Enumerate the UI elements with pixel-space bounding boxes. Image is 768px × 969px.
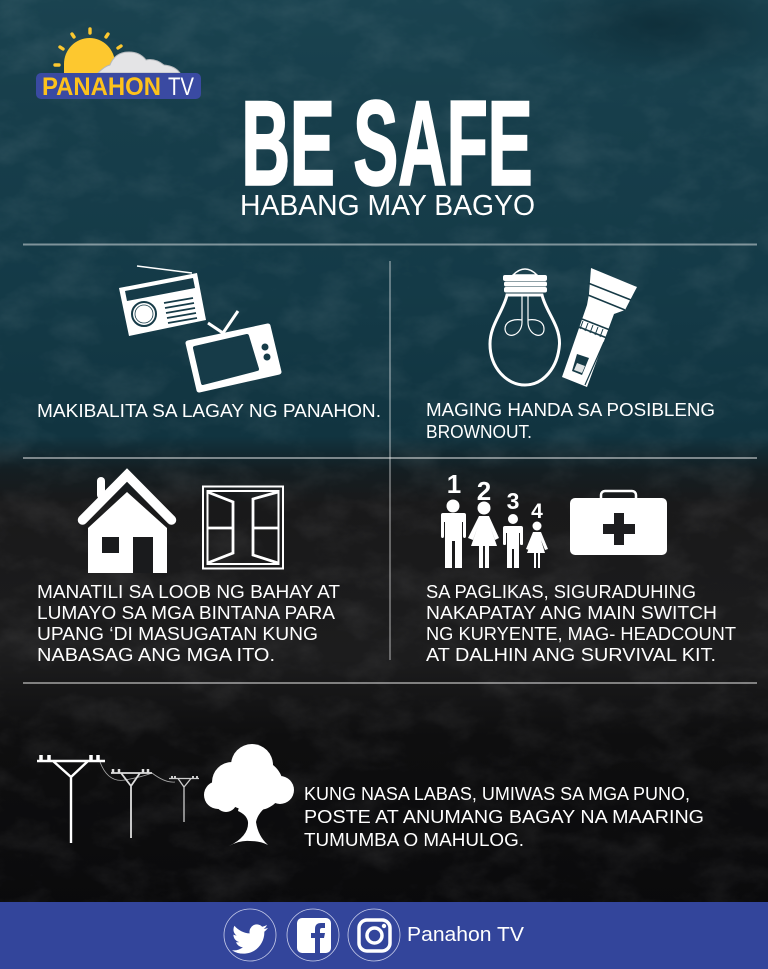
text: stay indoors: LUMAYO SA MGA BINTANA PARA [37, 603, 335, 623]
text: Panahon TV handle: Panahon TV [407, 924, 525, 946]
title: BE SAFE [242, 76, 532, 210]
panel: stay indoors [37, 475, 340, 665]
icon: twitter [224, 909, 276, 961]
text: evacuation: SA PAGLIKAS, SIGURADUHING [426, 582, 696, 602]
panel: stay informed [37, 266, 381, 421]
icon: family headcount: 4 [531, 500, 543, 523]
icon: instagram [348, 909, 400, 961]
text: outdoors: KUNG NASA LABAS, UMIWAS SA MGA PUNO, [304, 784, 690, 804]
panel: outdoors [37, 744, 704, 850]
text: evacuation: NAKAPATAY ANG MAIN SWITCH [426, 603, 717, 623]
text: stay indoors: NABASAG ANG MGA ITO. [37, 645, 275, 665]
logo: Panahon TV [36, 29, 201, 101]
icon: family headcount: 2 [477, 476, 491, 506]
panel: evacuation [426, 469, 736, 665]
title: HABANG MAY BAGYO [240, 190, 535, 222]
icon: tree [204, 744, 294, 846]
logo: Panahon TV: PANAHON [42, 73, 161, 101]
icon: family headcount: 3 [507, 488, 519, 514]
text: outdoors: POSTE AT ANUMANG BAGAY NA MAARING [304, 807, 704, 827]
text: evacuation: AT DALHIN ANG SURVIVAL KIT. [426, 645, 716, 665]
icon: television [188, 311, 279, 390]
text: stay indoors: MANATILI SA LOOB NG BAHAY AT [37, 582, 340, 602]
icon: facebook [287, 909, 339, 961]
text: evacuation [426, 582, 736, 665]
icon: house [82, 475, 172, 573]
text: stay informed: MAKIBALITA SA LAGAY NG PANAHON. [37, 401, 381, 421]
icon: survival kit [570, 491, 667, 555]
icon: family headcount: 1 [447, 469, 461, 499]
text: stay indoors: UPANG ‘DI MASUGATAN KUNG [37, 624, 318, 644]
icon: power poles [37, 755, 199, 843]
icon: radio [119, 266, 206, 336]
text: brownout: BROWNOUT. [426, 422, 532, 442]
panel: brownout [426, 268, 715, 442]
text: outdoors: TUMUMBA O MAHULOG. [304, 830, 524, 850]
footer bar [0, 902, 768, 969]
title [240, 76, 535, 222]
text: outdoors [304, 784, 704, 850]
icon: flashlight [562, 268, 637, 387]
icon: light bulb [490, 269, 560, 385]
text: brownout: MAGING HANDA SA POSIBLENG [426, 400, 715, 420]
text: stay indoors [37, 582, 340, 665]
icon: open window [203, 486, 283, 568]
text: evacuation: NG KURYENTE, MAG- HEADCOUNT [426, 624, 736, 644]
logo: Panahon TV: TV [168, 73, 194, 101]
icon: family headcount [441, 469, 548, 568]
text: brownout [426, 400, 715, 442]
